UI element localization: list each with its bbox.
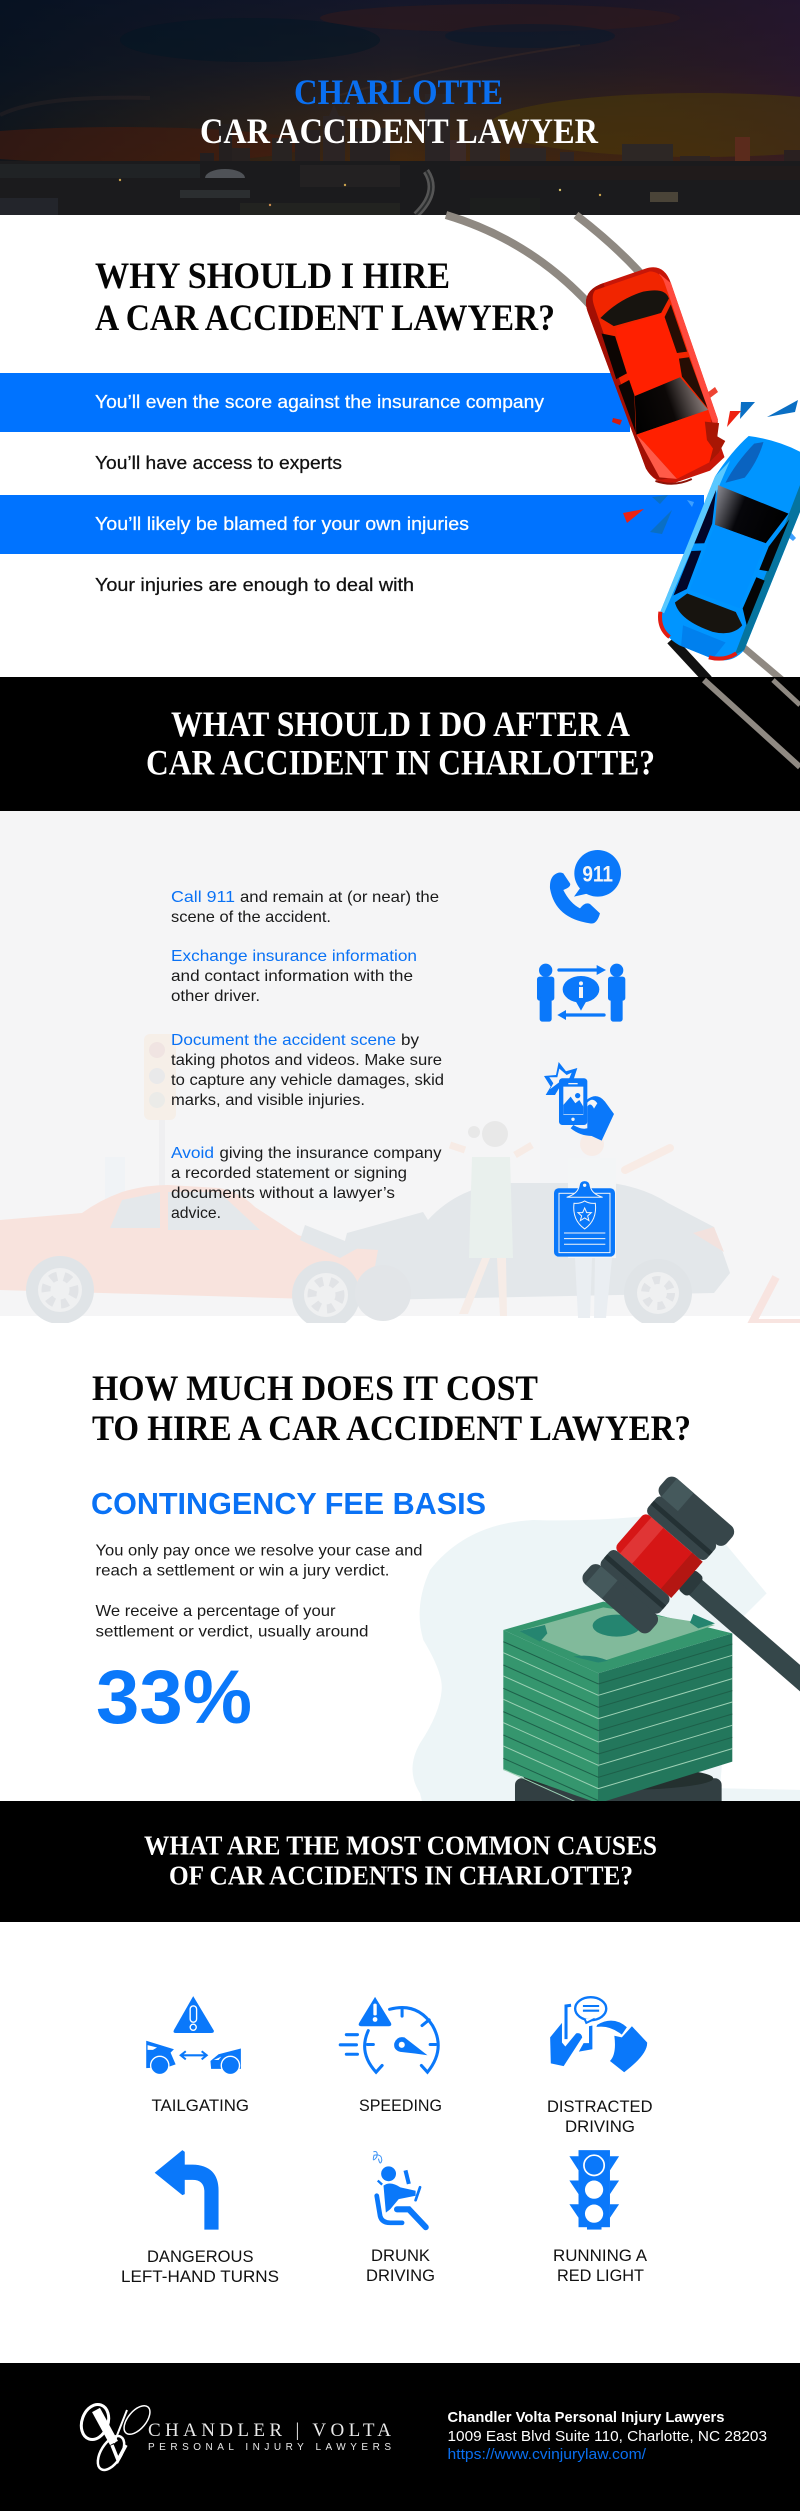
label: DRIVING [565,2118,635,2136]
label [553,2247,647,2285]
icon: tailgating cars [146,1996,241,2075]
label [547,2098,653,2136]
step 1: call 911: scene of the accident. [171,909,331,926]
panel: common causes heading band [0,1801,800,1922]
icon: photo with phone [544,1062,614,1141]
title: CAR ACCIDENT LAWYER [200,111,599,151]
title [200,72,599,151]
step 3: document: marks, and visible injuries. [171,1092,365,1109]
icon: blue car [651,425,800,668]
step text [171,889,444,1222]
step 4: avoid: a recorded statement or signing [171,1165,407,1182]
step 2: exchange info: and contact information with the [171,968,413,985]
icon: speedometer [340,1997,438,2072]
logo wordmark: PERSONAL INJURY LAWYERS [148,2442,391,2453]
gavel [582,1476,800,1692]
reasons list: You’ll have access to experts [95,453,342,473]
label: RED LIGHT [557,2267,644,2285]
pedestal [515,1767,722,1801]
label: DRUNK [371,2247,430,2265]
cause: drunk driving [366,2151,435,2285]
steps background [0,811,800,1316]
fee explanation [96,1542,422,1640]
label [121,2248,279,2286]
illustration: gavel on money [412,1473,800,1812]
heading: A CAR ACCIDENT LAWYER? [95,297,555,338]
step 4: avoid: advice. [171,1205,221,1222]
logo wordmark [148,2420,391,2453]
fee explanation: We receive a percentage of your [96,1603,336,1620]
step 3: document: Document the accident scene [171,1032,396,1049]
step 1: call 911: and remain at (or near) the [240,889,439,906]
heading: TO HIRE A CAR ACCIDENT LAWYER? [92,1408,691,1448]
reasons list: Your injuries are enough to deal with [95,575,414,595]
panel: cost of hiring a lawyer [91,1368,800,1812]
cause: left-hand turns [121,2150,279,2286]
step 3: document [171,1032,444,1109]
fee explanation: reach a settlement or win a jury verdict. [96,1562,390,1580]
step 2: exchange info [171,948,417,1005]
label: SPEEDING [359,2097,442,2115]
icon: 911 phone: 911 [582,862,613,887]
subheading: CONTINGENCY FEE BASIS [91,1486,486,1521]
step 4: avoid: giving the insurance company [220,1145,442,1162]
panel: what to do after an accident [0,677,800,1329]
tire skid marks [446,215,782,680]
heading [95,255,555,338]
33 percent figure: 33% [96,1655,252,1740]
backdrop blob [412,1513,800,1807]
contact details: Chandler Volta Personal Injury Lawyers [448,2409,724,2426]
icon: red car [581,262,734,494]
label: RUNNING A [553,2247,647,2265]
title: CHARLOTTE [294,72,503,112]
reason bars [0,373,704,554]
heading band [0,677,800,811]
fee explanation: settlement or verdict, usually around [96,1624,368,1640]
step 3: document: to capture any vehicle damages, skid [171,1072,444,1089]
icon: crash fragments [612,387,798,541]
step 3: document: by [401,1032,419,1049]
icon: information exchange [537,964,625,1022]
icon: traffic light [569,2150,619,2230]
contact details: 1009 East Blvd Suite 110, Charlotte, NC 28203 [448,2428,767,2445]
icon: drunk driver [373,2151,426,2227]
heading: HOW MUCH DOES IT COST [92,1368,538,1408]
reasons list [95,392,544,595]
panel: why hire a lawyer [0,215,800,680]
heading [144,1830,657,1890]
cause: tailgating [146,1996,249,2115]
heading band: CAR ACCIDENT IN CHARLOTTE? [146,742,655,782]
city skyline photo background [0,0,800,215]
heading band: WHAT SHOULD I DO AFTER A [171,704,630,744]
label: DRIVING [366,2267,435,2285]
icon: phone in hands [550,1997,647,2072]
icon: police report clipboard [554,1181,615,1257]
step 4: avoid [171,1145,442,1222]
contact details: https://www.cvinjurylaw.com/ [448,2446,647,2463]
footer [0,2363,800,2511]
reasons list: You’ll even the score against the insurance company [95,392,544,412]
panel: causes grid [121,1996,653,2286]
step 1: call 911: Call 911 [171,889,235,906]
label: DANGEROUS [147,2248,254,2266]
label: LEFT-HAND TURNS [121,2268,279,2286]
logo monogram [77,2401,155,2474]
fee explanation: You only pay once we resolve your case and [96,1542,422,1560]
money stack [503,1602,732,1812]
icon: left turn arrow [155,2150,219,2230]
step 3: document: taking photos and videos. Make sure [171,1052,442,1069]
step 2: exchange info: Exchange insurance information [171,948,417,965]
reasons list: You’ll likely be blamed for your own injuries [95,514,469,534]
cause: red light [553,2150,647,2285]
step 4: avoid: documents without a lawyer’s [171,1185,395,1202]
step 2: exchange info: other driver. [171,988,260,1005]
cause: distracted driving [547,1997,653,2136]
label: DISTRACTED [547,2098,653,2116]
cause: speeding [340,1997,442,2115]
heading: OF CAR ACCIDENTS IN CHARLOTTE? [169,1860,633,1890]
heading: WHAT ARE THE MOST COMMON CAUSES [144,1830,657,1860]
icon: 911 phone [550,850,621,924]
step 4: avoid: Avoid [171,1145,214,1162]
label: TAILGATING [152,2097,249,2115]
logo [77,2401,391,2474]
heading [92,1368,691,1448]
contact details [448,2409,767,2463]
step 1: call 911 [171,889,439,926]
logo wordmark: CHANDLER | VOLTA [148,2420,391,2441]
heading: WHY SHOULD I HIRE [95,255,450,296]
label [366,2247,435,2285]
faded crash scene illustration [0,1034,800,1329]
header banner [0,0,800,215]
